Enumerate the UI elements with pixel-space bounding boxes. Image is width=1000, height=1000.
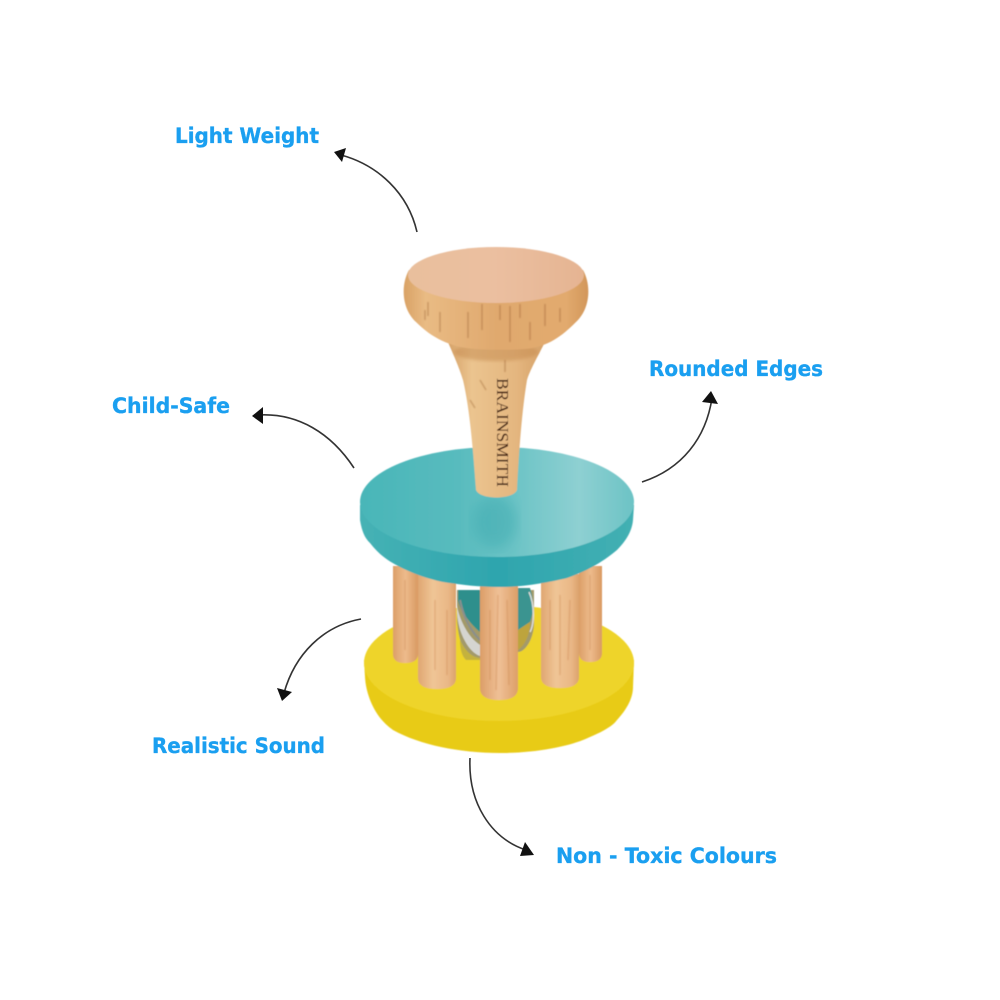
engraved brand: BRAINSMITH — [493, 378, 512, 487]
arrow: Rounded Edges — [642, 391, 718, 482]
stem — [447, 340, 546, 498]
cap top — [408, 247, 584, 303]
label: Light Weight: Light Weight — [175, 124, 319, 148]
arrow: Non - Toxic Colours — [470, 758, 534, 856]
wooden knob handle — [404, 247, 588, 498]
arrow: Child-Safe — [252, 407, 354, 468]
cap side — [404, 270, 588, 350]
label: Realistic Sound: Realistic Sound — [152, 734, 325, 758]
yellow base disc — [364, 605, 634, 753]
label: Non - Toxic Colours: Non - Toxic Colours — [556, 844, 777, 868]
wood grain — [425, 302, 560, 408]
teal reflection right — [518, 588, 533, 630]
front wooden rods — [405, 574, 590, 700]
silver rim — [457, 606, 482, 656]
teal disc — [360, 447, 634, 587]
label: Rounded Edges: Rounded Edges — [649, 357, 823, 381]
rattle toy — [360, 247, 634, 753]
bell dark body — [457, 590, 534, 660]
gold base of bell — [460, 640, 480, 660]
stem shadow under cap — [454, 343, 538, 361]
arrow: Realistic Sound — [277, 619, 361, 701]
back wooden rods — [393, 566, 602, 663]
metal bell — [457, 588, 534, 660]
label: Child-Safe: Child-Safe — [112, 394, 230, 418]
arrow: Light Weight — [334, 148, 417, 232]
teal reflection left — [458, 590, 480, 632]
